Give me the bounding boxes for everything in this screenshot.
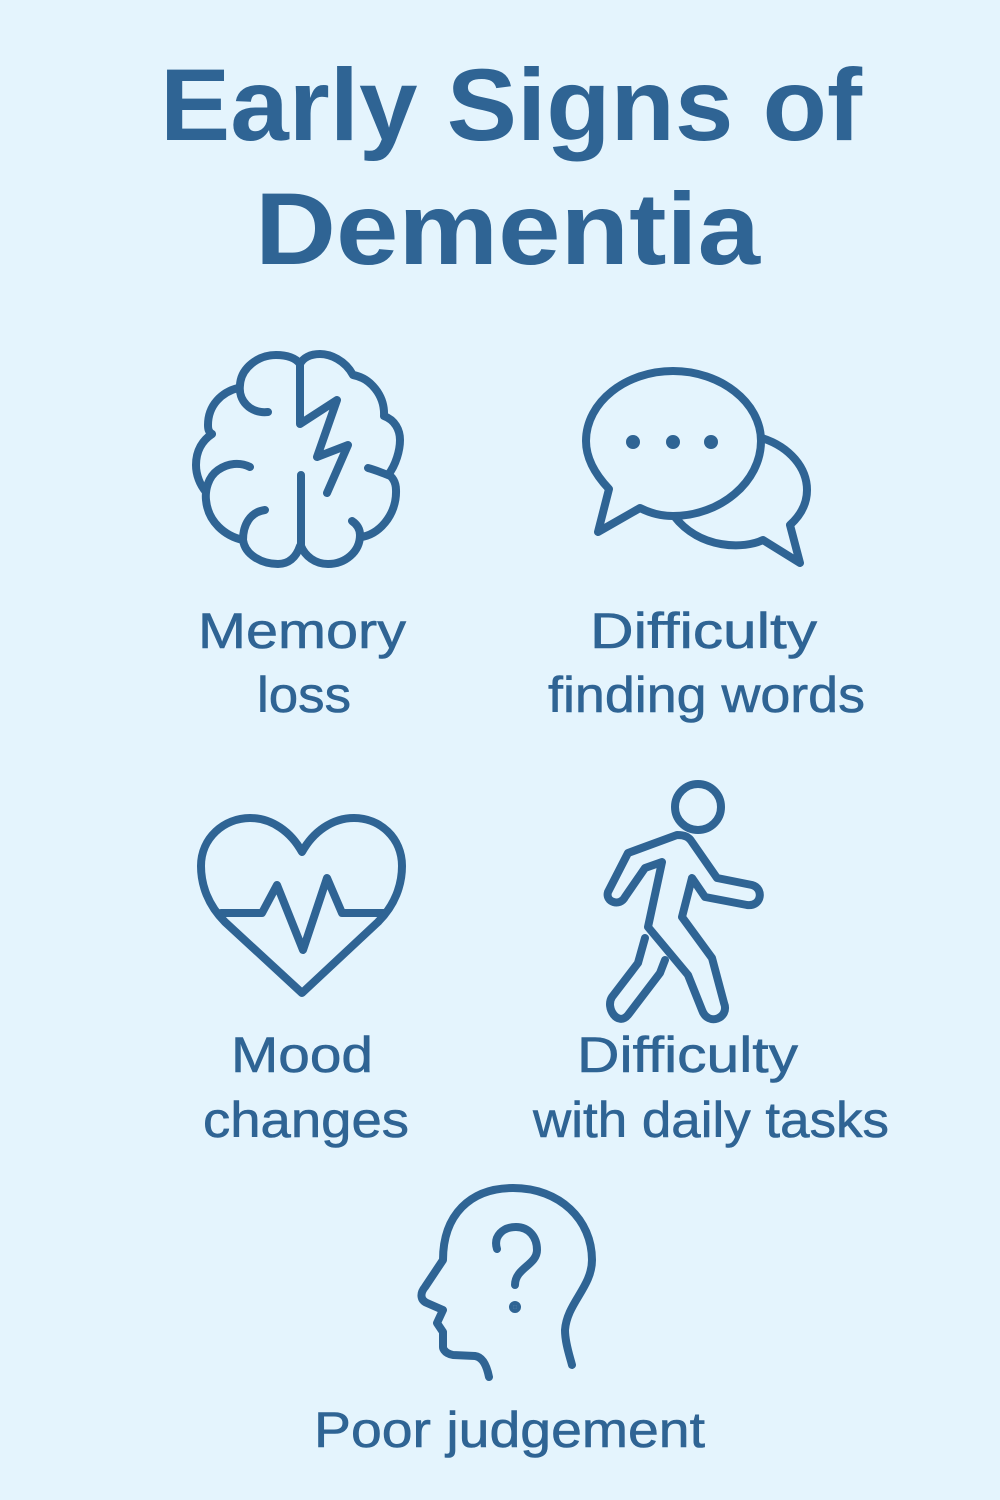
panel: poor judgement: [314, 1188, 705, 1458]
label: difficulty with daily tasks: [532, 1027, 889, 1148]
label: mood changes: [203, 1027, 409, 1148]
label: mood changes: changes: [203, 1092, 409, 1148]
panel: difficulty finding words: [548, 371, 865, 723]
title: Dementia: [255, 172, 761, 286]
icon: brain with lightning bolt: [196, 354, 400, 564]
icon: speech bubbles: [586, 371, 807, 563]
title: Early Signs of: [160, 48, 863, 162]
panel: memory loss: [196, 354, 406, 723]
label: difficulty finding words: finding words: [548, 667, 865, 723]
label: memory loss: [198, 603, 406, 723]
icon: walking person: [608, 784, 760, 1019]
label: poor judgement: Poor judgement: [314, 1402, 705, 1458]
label: memory loss: Memory: [198, 603, 406, 659]
label: difficulty finding words: Difficulty: [590, 603, 817, 659]
label: difficulty finding words: [548, 603, 865, 723]
panel: difficulty with daily tasks: [532, 784, 889, 1148]
title: [160, 48, 863, 286]
icon: heart with pulse: [201, 818, 402, 993]
label: difficulty with daily tasks: Difficulty: [577, 1027, 798, 1083]
panel: mood changes: [201, 818, 409, 1148]
label: memory loss: loss: [257, 667, 351, 723]
label: difficulty with daily tasks: with daily tasks: [532, 1092, 889, 1148]
label: mood changes: Mood: [231, 1027, 373, 1083]
icon: head with question mark: [421, 1188, 592, 1377]
